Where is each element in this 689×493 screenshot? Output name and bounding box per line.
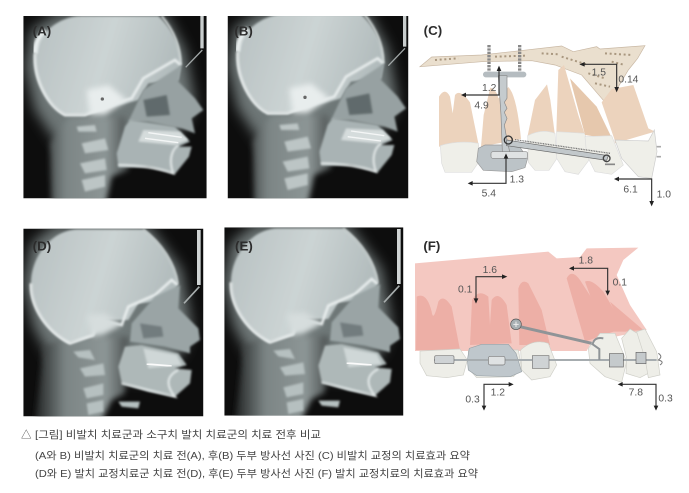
measurements: 0.1 bbox=[613, 278, 627, 289]
archwire and brackets bbox=[434, 352, 662, 368]
panel B: post-treatment lateral head X-ray: (B) bbox=[234, 23, 253, 38]
measurements: 0.3 bbox=[658, 394, 673, 405]
panel A: pre-treatment lateral head X-ray: (A) bbox=[33, 23, 51, 38]
measurements: 0.14 bbox=[618, 74, 639, 85]
measurements bbox=[458, 255, 673, 411]
measurements: 1.0 bbox=[657, 190, 671, 201]
measurements: 0.1 bbox=[458, 284, 473, 295]
panel E: post-treatment lateral head X-ray: (E) bbox=[235, 239, 253, 254]
panel F: extraction treatment summary diagram bbox=[415, 238, 673, 410]
panel C: non-extraction treatment summary diagram bbox=[419, 23, 671, 206]
panel D: pre-treatment lateral head X-ray: (D) bbox=[33, 239, 51, 254]
measurements: 1.5 bbox=[592, 68, 606, 79]
label C: (C) bbox=[424, 23, 442, 38]
caption line 1: △ bbox=[21, 429, 32, 441]
measurements: 5.4 bbox=[482, 188, 496, 199]
measurements: 6.1 bbox=[623, 185, 638, 196]
measurements: 1.2 bbox=[491, 388, 505, 399]
label F: (F) bbox=[423, 238, 440, 253]
gum bbox=[415, 248, 647, 351]
measurements: 7.8 bbox=[629, 388, 643, 399]
measurements: 1.3 bbox=[510, 175, 524, 186]
mini-screw and hook arm bbox=[511, 319, 603, 360]
teeth bbox=[439, 65, 661, 178]
caption line 1: [그림] 비발치 치료군과 소구치 발치 치료군의 치료 전후 비교 bbox=[35, 429, 321, 441]
panel B: post-treatment lateral head X-ray bbox=[228, 16, 408, 198]
tooth roots bbox=[416, 274, 643, 350]
measurements: 1.6 bbox=[483, 265, 497, 276]
measurements: 1.8 bbox=[579, 255, 593, 266]
mini-plate, band and retraction arm bbox=[477, 45, 615, 172]
measurements: 1.2 bbox=[482, 83, 497, 94]
measurements bbox=[461, 62, 671, 206]
measurements: 4.9 bbox=[474, 101, 489, 112]
molar band bbox=[467, 344, 522, 377]
caption line 2: (A와 B) 비발치 치료군의 치료 전(A), 후(B) 두부 방사선 사진 (C) 비발치 교정의 치료효과 요약 bbox=[35, 450, 470, 462]
bone strip bbox=[420, 46, 645, 110]
panel E: post-treatment lateral head X-ray bbox=[224, 227, 404, 416]
caption bbox=[21, 429, 478, 480]
tooth crowns bbox=[420, 329, 660, 382]
panel D: pre-treatment lateral head X-ray bbox=[23, 228, 204, 416]
caption line 3: (D와 E) 발치 교정치료군 치료 전(D), 후(E) 두부 방사선 사진 (F) 발치 교정치료의 치료효과 요약 bbox=[35, 468, 478, 480]
panel A: pre-treatment lateral head X-ray bbox=[23, 16, 207, 198]
measurements: 0.3 bbox=[465, 394, 480, 405]
